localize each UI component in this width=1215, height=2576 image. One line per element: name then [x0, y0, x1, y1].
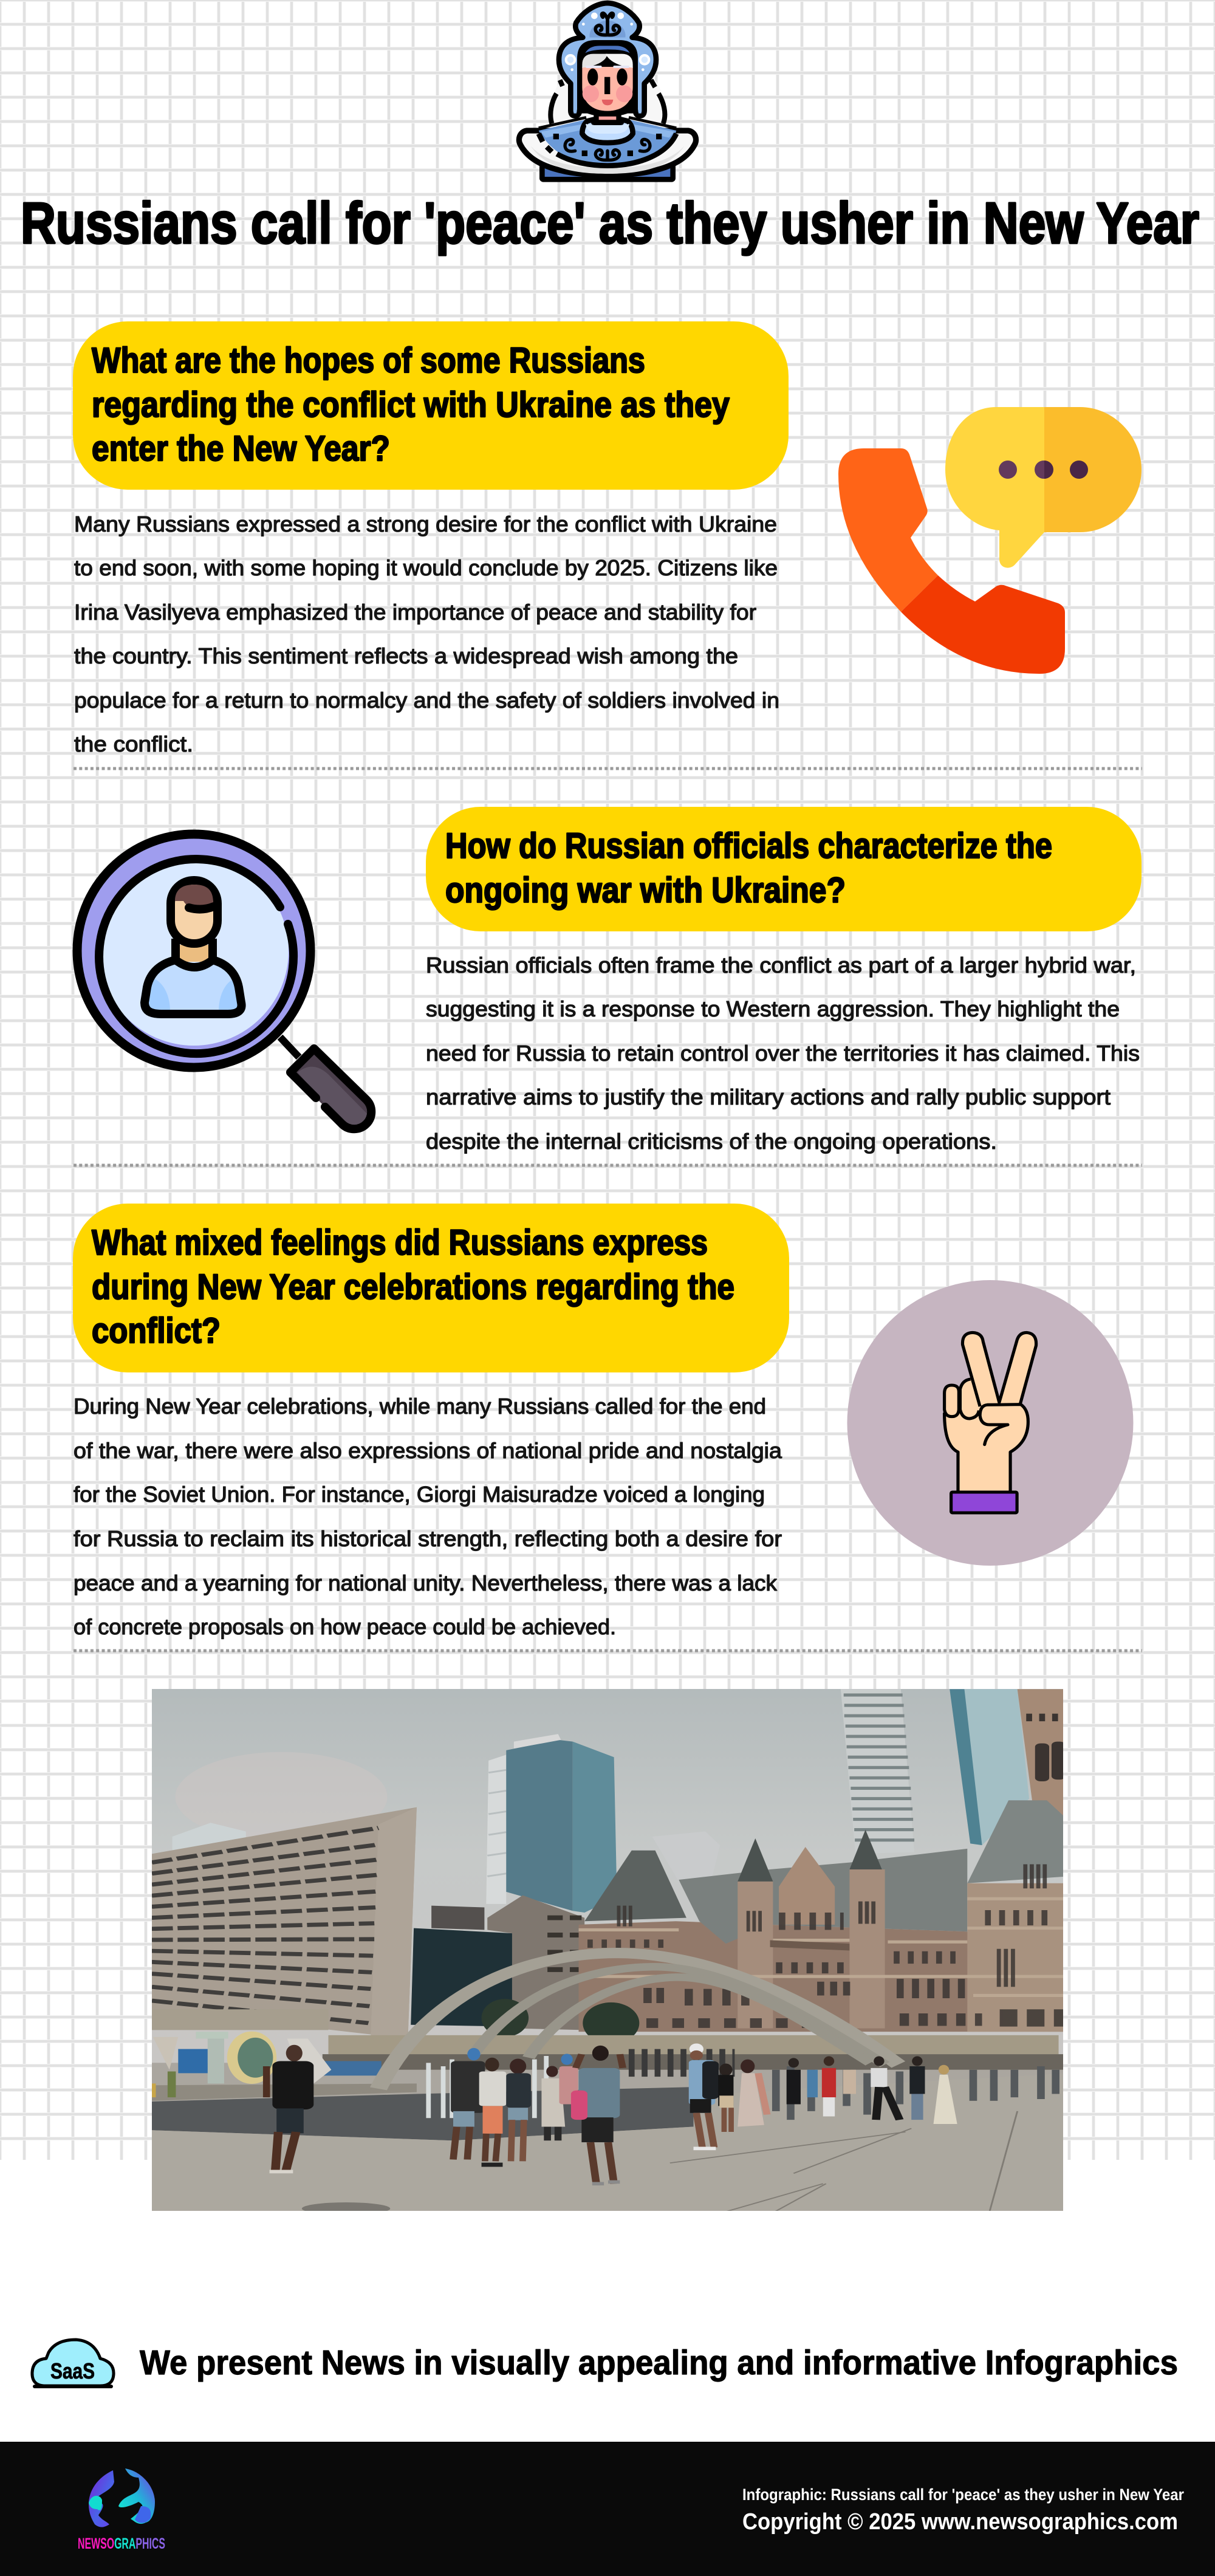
panel: hopes heading card: What are the hopes of some Russians — [92, 341, 645, 380]
copyright: Copyright © 2025 www.newsographics.com — [742, 2509, 1178, 2535]
icon: peace hand on circle — [847, 1280, 1134, 1566]
text block: hopes body: to end soon, with some hoping it would conclude by 2025. Citizens like — [74, 555, 778, 580]
panel: hopes heading card: enter the New Year? — [92, 429, 390, 468]
text block: officials body — [426, 953, 1140, 1154]
logo: globe mark — [89, 2468, 155, 2527]
text block: mixed feelings body: of the war, there were also expressions of national pride and nostalgia — [74, 1438, 782, 1463]
text block: mixed feelings body — [74, 1394, 782, 1639]
text block: hopes body: Many Russians expressed a strong desire for the conflict with Ukraine — [74, 512, 777, 536]
panel: officials heading card: How do Russian officials characterize the — [445, 826, 1052, 866]
panel: officials heading card — [426, 807, 1141, 931]
text block: officials body: narrative aims to justify the military actions and rally public support — [426, 1084, 1111, 1109]
text block: mixed feelings body: for Russia to reclaim its historical strength, reflecting both a desire for — [74, 1526, 782, 1551]
panel: mixed feelings heading card: during New Year celebrations regarding the — [92, 1267, 734, 1307]
icon: woman in kokoshnik headdress — [519, 3, 696, 179]
text block: officials body: need for Russia to retain control over the territories it has claimed. This — [426, 1041, 1140, 1066]
text block: officials body: suggesting it is a response to Western aggression. They highlight the — [426, 996, 1120, 1021]
text block: mixed feelings body: During New Year celebrations, while many Russians called for the end — [74, 1394, 766, 1419]
text block: mixed feelings body: peace and a yearning for national unity. Nevertheless, there was a lack — [74, 1571, 778, 1595]
icon: SaaS cloud: SaaS — [50, 2358, 95, 2383]
text block: officials body: despite the internal criticisms of the ongoing operations. — [426, 1129, 997, 1154]
icon: SaaS cloud — [32, 2340, 114, 2388]
panel: officials heading card: ongoing war with Ukraine? — [445, 871, 846, 910]
panel: hopes heading card — [73, 321, 789, 490]
panel: mixed feelings heading card — [73, 1204, 789, 1372]
panel: mixed feelings heading card: What mixed feelings did Russians express — [92, 1223, 708, 1262]
photo: city hall square illustration — [146, 1683, 1088, 2218]
text block: hopes body: populace for a return to normalcy and the safety of soldiers involved in — [74, 688, 779, 713]
text block: hopes body: the country. This sentiment reflects a widespread wish among the — [74, 643, 738, 668]
text block: mixed feelings body: for the Soviet Union. For instance, Giorgi Maisuradze voiced a longing — [74, 1482, 765, 1507]
text block: hopes body — [74, 512, 779, 756]
footer band — [0, 2442, 1215, 2576]
text block: officials body: Russian officials often frame the conflict as part of a larger hybrid war, — [426, 953, 1136, 978]
text block: hopes body: Irina Vasilyeva emphasized the importance of peace and stability for — [74, 600, 756, 625]
panel: hopes heading card: regarding the conflict with Ukraine as they — [92, 385, 730, 425]
icon: phone and speech bubble — [838, 407, 1141, 674]
panel: mixed feelings heading card: conflict? — [92, 1311, 221, 1351]
logo: wordmark: NEWSOGRAPHICS — [78, 2535, 165, 2552]
text block: mixed feelings body: of concrete proposals on how peace could be achieved. — [74, 1614, 616, 1639]
icon: magnifying glass over person — [77, 834, 371, 1129]
text block: hopes body: the conflict. — [74, 731, 193, 756]
photo detail: crowd of people — [152, 2043, 1056, 2184]
